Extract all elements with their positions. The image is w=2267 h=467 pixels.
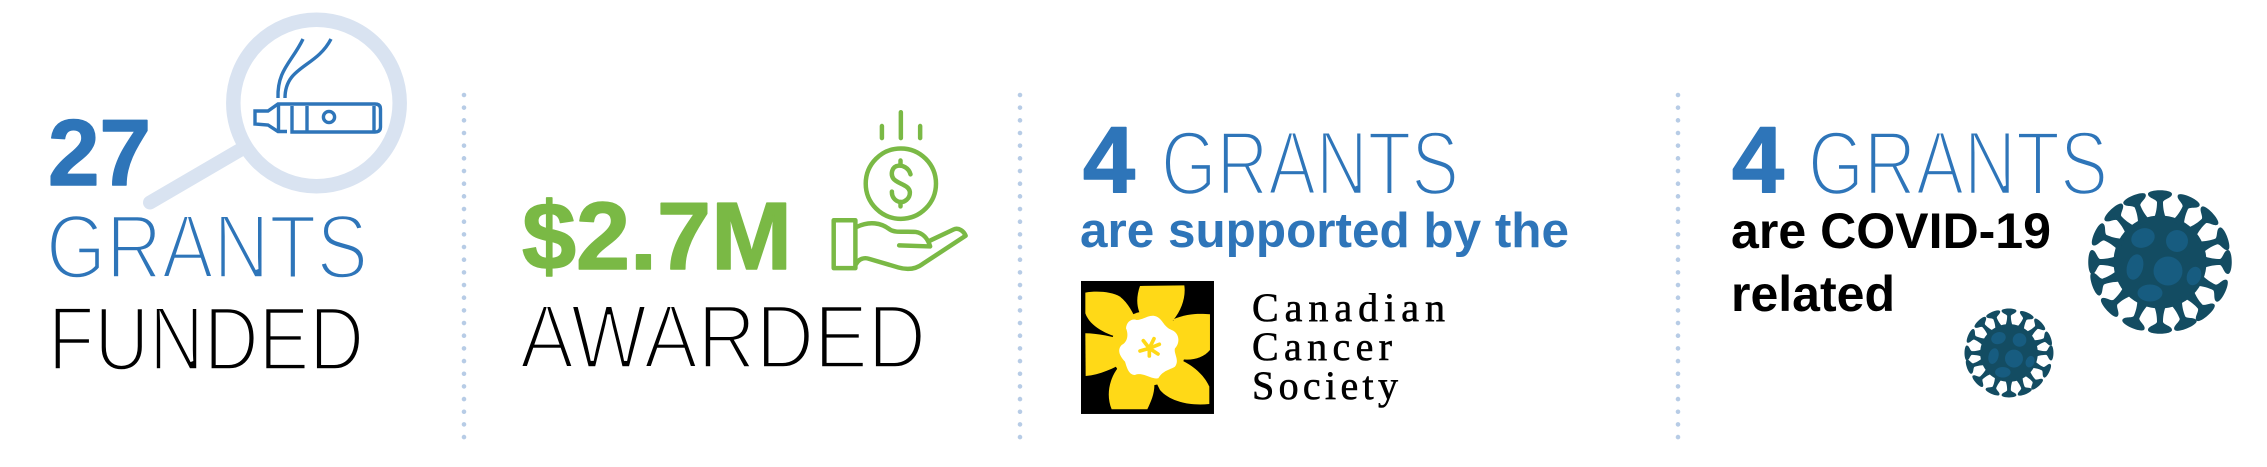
- number: 4: 4: [1732, 107, 1784, 212]
- heading: GRANTS: GRANTS: [1161, 114, 1459, 214]
- panel: 4 grants COVID-19 related: [1731, 107, 2232, 397]
- logo text: Canadian Cancer Society: Canadian: [1252, 285, 1445, 330]
- icon: small virus: [1965, 309, 2053, 397]
- logo text: Canadian Cancer Society: [1252, 285, 1445, 408]
- text: AWARDED: AWARDED: [520, 287, 926, 388]
- panel: $2.7M awarded: [520, 112, 966, 388]
- number: $2.7M: $2.7M: [522, 183, 792, 290]
- text: are supported by the: are supported by the: [1080, 204, 1569, 258]
- number: 4: 4: [1083, 107, 1135, 212]
- heading: GRANTS: GRANTS: [46, 197, 368, 298]
- logo text: Canadian Cancer Society: Society: [1252, 363, 1398, 408]
- text: FUNDED: FUNDED: [48, 289, 364, 390]
- panel: 4 grants supported by the Canadian Cancer Society: [1080, 107, 1569, 414]
- text: are COVID-19: are COVID-19: [1731, 203, 2051, 259]
- text: related: related: [1731, 266, 1895, 322]
- number: 27: 27: [48, 100, 151, 205]
- logo text: Canadian Cancer Society: Cancer: [1252, 324, 1392, 369]
- panel: 27 grants funded: [46, 20, 400, 390]
- icon: magnifying glass with e-cigarette: [150, 20, 400, 202]
- icon: large virus: [2088, 190, 2232, 334]
- logo: daffodil: [1081, 281, 1214, 414]
- heading: GRANTS: GRANTS: [1808, 114, 2108, 214]
- icon: hand holding coin: [834, 112, 966, 269]
